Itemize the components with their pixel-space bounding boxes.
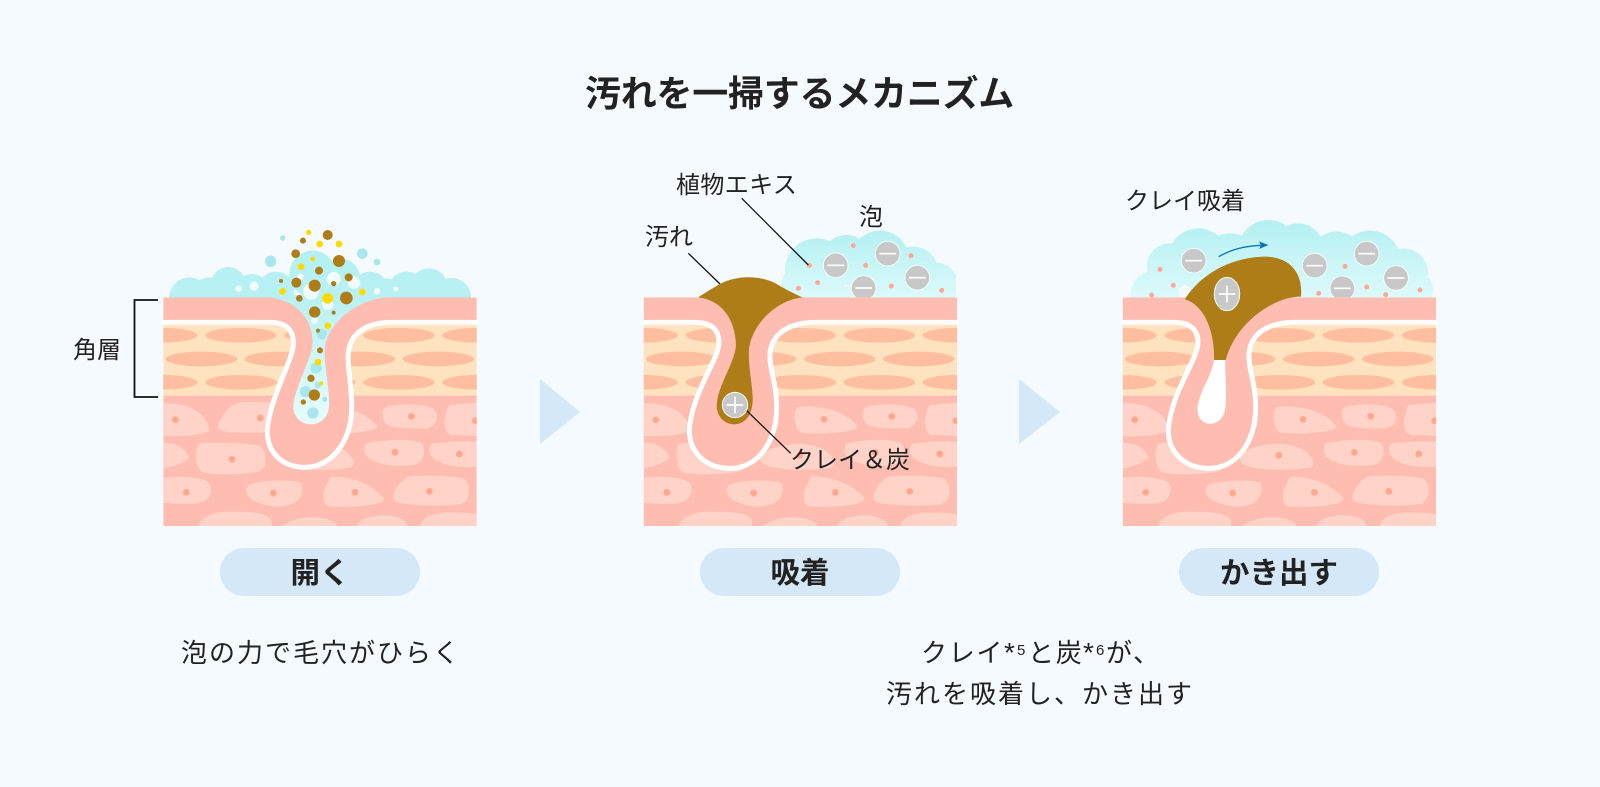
clay and charcoal particle [722,392,748,418]
label: clay and charcoal: クレイ＆炭 [790,447,910,474]
arrow: step 2 to step 3 [1019,379,1060,444]
label: clay adsorption: クレイ吸着 [1125,188,1245,215]
panel: scrape out [1121,188,1438,526]
caption: steps 2 and 3: 5 [1017,642,1025,659]
panel: open pores [73,230,514,527]
caption: steps 2 and 3: 汚れを吸着し、かき出す [886,679,1194,709]
pill: scrape out: かき出す [1220,557,1338,590]
pore filled with foam [270,297,390,424]
foam: step 2 [781,230,956,298]
skin cross-section: step 1 [126,297,514,527]
pill: open [220,548,420,596]
pill: open: 開く [290,557,350,590]
label: foam: 泡 [859,204,883,231]
clay particle [1214,277,1240,311]
arrow: step 1 to step 2 [540,379,580,444]
foam: step 1 [169,251,471,317]
caption: steps 2 and 3: が、 [1106,638,1161,668]
dirt lifted from pore [1185,257,1301,360]
label: plant extract: 植物エキス [676,172,797,199]
arrow: lifting direction [1219,241,1268,257]
dirt in pore [698,277,803,424]
pill: adsorb: 吸着 [770,557,830,590]
caption: steps 2 and 3: * [1004,637,1015,668]
caption: steps 2 and 3: * [1083,637,1094,668]
caption: step 1: 泡の力で毛穴がひらく [181,638,461,668]
pill: adsorb [700,548,900,596]
caption: steps 2 and 3: 6 [1096,642,1104,659]
foam: step 3 [1130,220,1434,298]
emptied pore [1197,359,1226,424]
particles: dirt and foam bubbles [235,230,398,419]
skin cross-section: step 2 [606,297,994,527]
caption: steps 2 and 3: と炭 [1028,638,1083,668]
bracket: stratum corneum [134,300,158,397]
caption: steps 2 and 3 [886,637,1194,709]
skin cross-section: step 3 [1085,297,1473,527]
label: dirt: 汚れ [645,224,693,251]
caption: steps 2 and 3: クレイ [921,638,1004,668]
leader lines: step 2 [688,198,808,453]
panel: adsorption [642,172,959,526]
label: stratum corneum: 角層 [73,337,121,364]
pill: scrape out [1179,548,1379,596]
title: 汚れを一掃するメカニズム [585,73,1014,114]
